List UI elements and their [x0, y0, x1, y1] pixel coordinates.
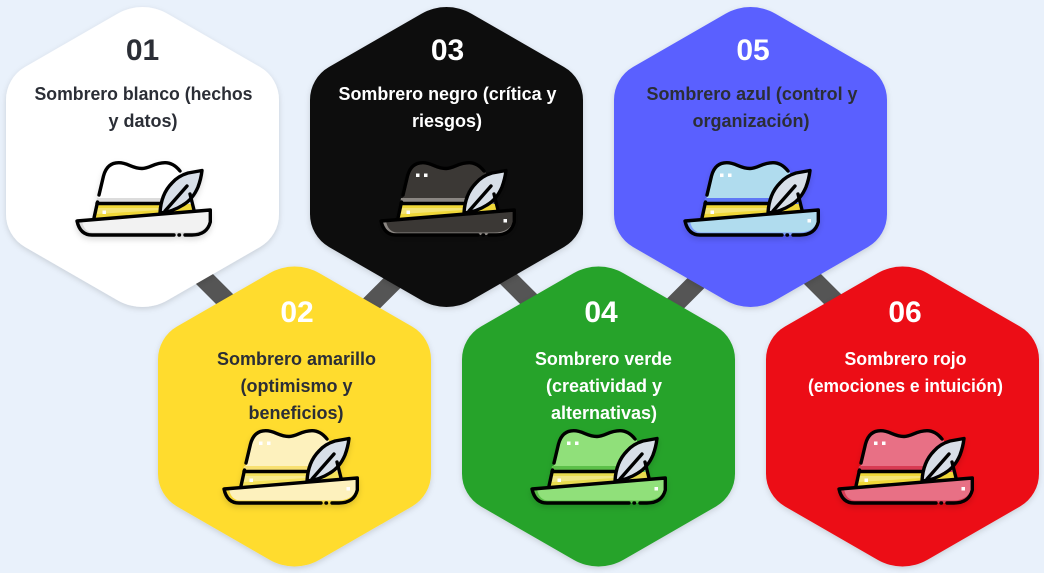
heading line 2: riesgos): [412, 111, 482, 131]
heading: white hat: Sombrero blanco (hechos: [34, 84, 252, 104]
heading: yellow hat: Sombrero amarillo: [217, 349, 376, 369]
heading line 2: (creatividad y: [546, 376, 662, 396]
heading: red hat: Sombrero rojo: [844, 349, 967, 369]
number 04: 04: [584, 296, 618, 329]
heading line 3: alternativas): [551, 403, 657, 423]
icon: red hat: [839, 431, 972, 503]
connectors between hexagons: [184, 259, 852, 323]
icon: yellow hat: [224, 431, 357, 503]
number 01: 01: [126, 34, 159, 67]
icon: blue hat: [685, 163, 818, 235]
heading line 2: y datos): [108, 111, 178, 131]
number 05: 05: [736, 34, 770, 67]
heading: green hat: Sombrero verde: [535, 349, 672, 369]
panel: 05 blue hat: [614, 7, 887, 307]
heading line 2: (emociones e intuición): [808, 376, 1003, 396]
heading: blue hat: Sombrero azul (control y: [646, 84, 858, 104]
panel: 02 yellow hat: [158, 267, 431, 566]
heading line 2: organización): [692, 111, 810, 131]
panel: 06 red hat: [766, 267, 1039, 566]
heading: black hat: Sombrero negro (crítica y: [338, 84, 556, 104]
heading line 2: (optimismo y: [240, 376, 353, 396]
icon: black hat: [381, 163, 514, 235]
number 03: 03: [431, 34, 464, 67]
number 02: 02: [280, 296, 314, 329]
panel: 01 white hat: [6, 7, 279, 307]
icon: white hat: [77, 163, 210, 235]
number 06: 06: [888, 296, 922, 329]
panel: 03 black hat: [310, 7, 583, 307]
heading line 3: beneficios): [248, 403, 344, 423]
panel: 04 green hat: [462, 267, 735, 566]
icon: green hat: [532, 431, 665, 503]
